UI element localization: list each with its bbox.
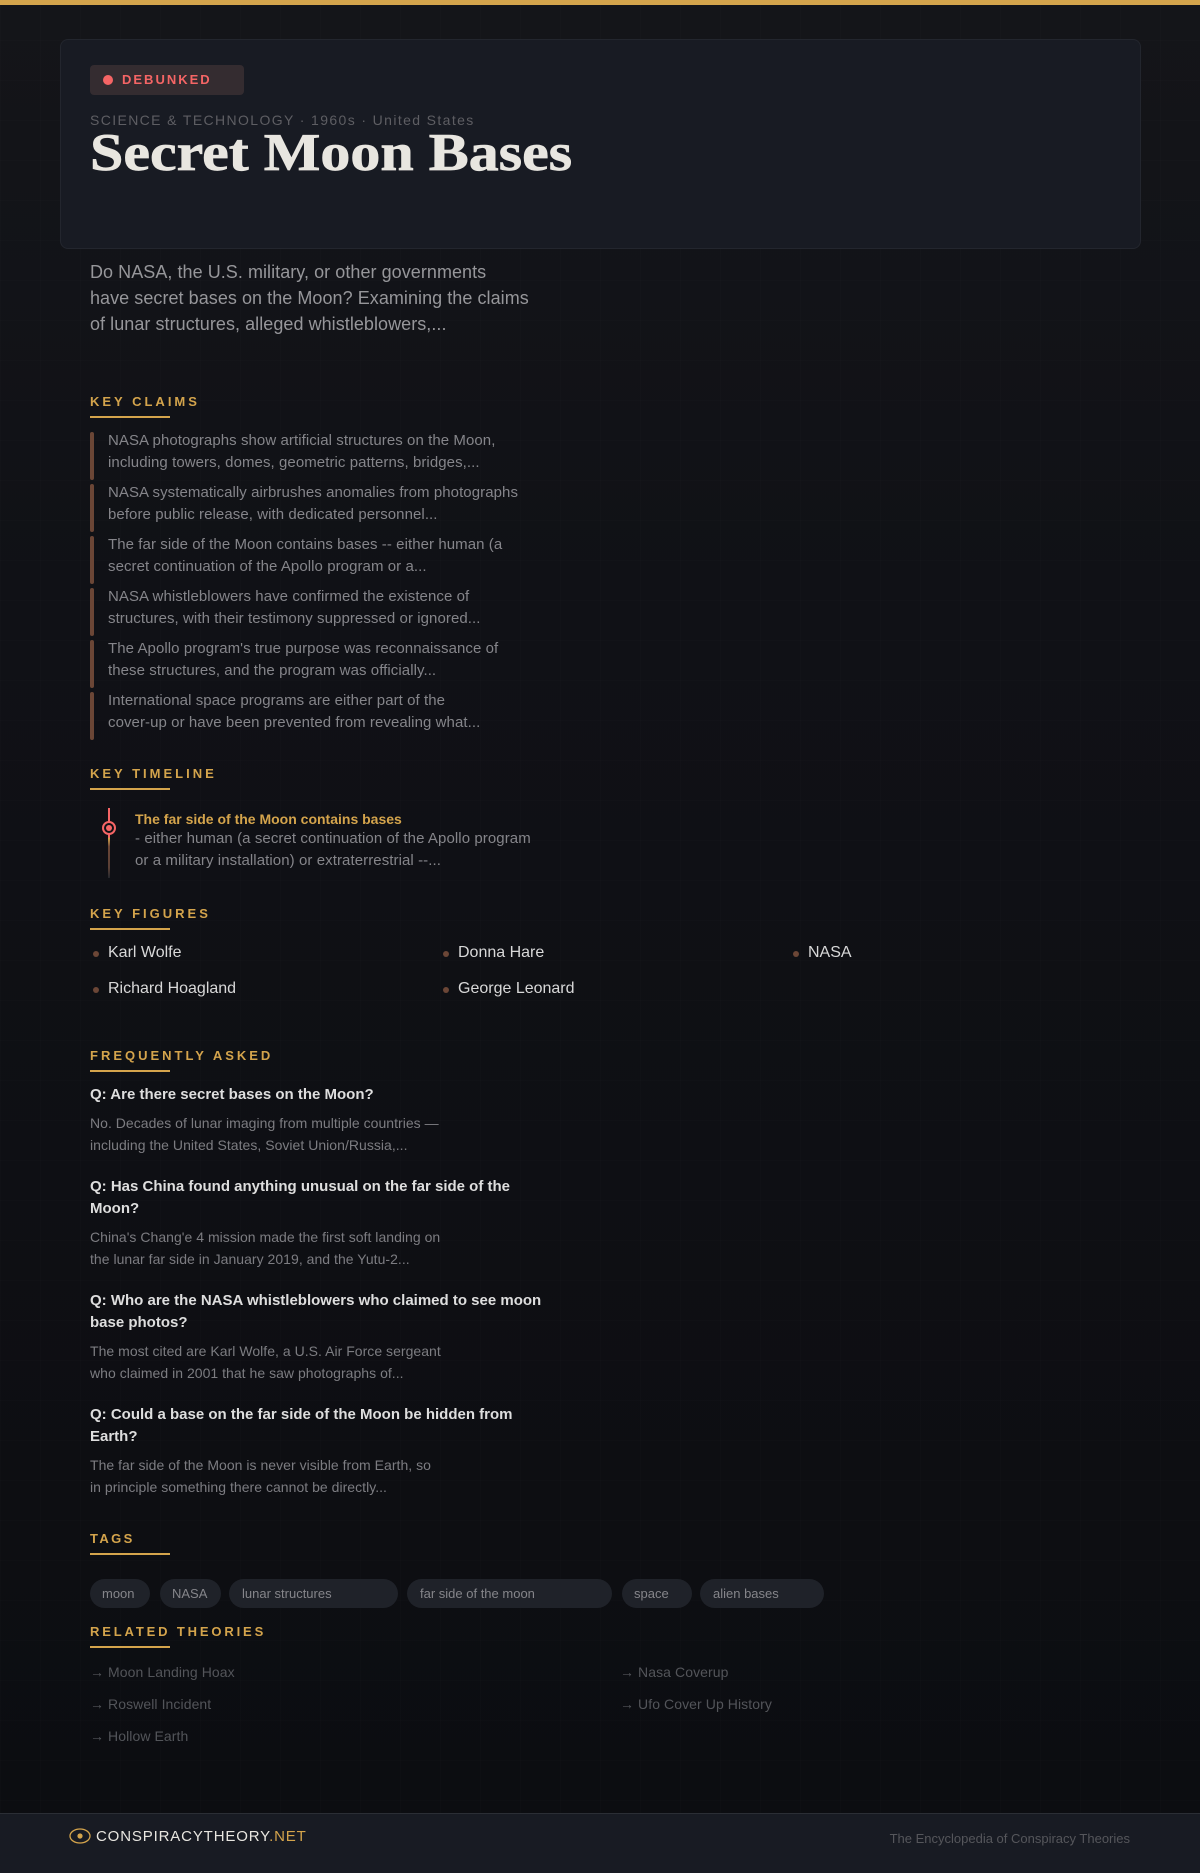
tag: space <box>622 1579 692 1608</box>
claim 4: NASA whistleblowers have confirmed the existence of <box>108 588 469 605</box>
claim 6: cover-up or have been prevented from revealing what... <box>108 714 480 731</box>
claim 3: The far side of the Moon contains bases -- either human (a <box>108 536 502 553</box>
link: Roswell Incident: → Roswell Incident <box>90 1696 211 1712</box>
badge dot <box>103 75 113 85</box>
tag: far side of the moon <box>407 1579 612 1608</box>
tag: NASA <box>160 1579 221 1608</box>
claim 2: NASA systematically airbrushes anomalies from photographs <box>108 484 518 501</box>
link: Ufo Cover Up History: → Ufo Cover Up History <box>620 1696 772 1712</box>
faq item 3 <box>90 1292 541 1381</box>
claim 5: these structures, and the program was officially... <box>108 662 436 679</box>
faq item 2: China's Chang'e 4 mission made the first soft landing on <box>90 1229 440 1245</box>
faq item 4: in principle something there cannot be directly... <box>90 1479 387 1495</box>
heading: related theories: RELATED THEORIES <box>90 1624 266 1639</box>
claim 4 <box>90 588 480 636</box>
faq item 3: who claimed in 2001 that he saw photographs of... <box>90 1365 404 1381</box>
faq item 2: the lunar far side in January 2019, and the Yutu-2... <box>90 1251 410 1267</box>
tag: NASA: NASA <box>172 1586 207 1601</box>
panel: hero header <box>60 39 1141 249</box>
tag: lunar structures: lunar structures <box>242 1586 332 1601</box>
panel: tags row <box>90 1579 824 1608</box>
link: Nasa Coverup: → Nasa Coverup <box>620 1664 728 1680</box>
faq item 1 <box>90 1086 439 1153</box>
faq item 4: The far side of the Moon is never visible from Earth, so <box>90 1457 431 1473</box>
faq item 3: Q: Who are the NASA whistleblowers who claimed to see moon <box>90 1292 541 1309</box>
intro description <box>90 262 529 334</box>
figure: Donna Hare: Donna Hare <box>458 944 544 961</box>
tag: space: space <box>634 1586 669 1601</box>
panel: timeline entry <box>102 808 531 878</box>
tag: lunar structures <box>229 1579 398 1608</box>
link: Moon Landing Hoax: → Moon Landing Hoax <box>90 1664 235 1680</box>
claim 2 <box>90 484 518 532</box>
faq item 4 <box>90 1406 513 1495</box>
faq item 3: The most cited are Karl Wolfe, a U.S. Air Force sergeant <box>90 1343 441 1359</box>
timeline title: The far side of the Moon contains bases <box>135 811 402 827</box>
footer <box>0 1813 1200 1873</box>
faq item 2: Moon? <box>90 1200 139 1217</box>
figure: George Leonard: George Leonard <box>458 980 575 997</box>
faq item 1: Q: Are there secret bases on the Moon? <box>90 1086 374 1103</box>
icon: eye logo <box>69 1828 91 1844</box>
tag: far side of the moon: far side of the moon <box>420 1586 535 1601</box>
claim 3: secret continuation of the Apollo program or a... <box>108 558 427 575</box>
timeline text <box>135 830 531 869</box>
claim 5 <box>90 640 498 688</box>
intro description: of lunar structures, alleged whistleblowers,... <box>90 314 447 334</box>
claim 5: The Apollo program's true purpose was reconnaissance of <box>108 640 498 657</box>
top accent bar <box>0 0 1200 5</box>
claim 6: International space programs are either part of the <box>108 692 445 709</box>
claim 3 <box>90 536 502 584</box>
panel: key figures list <box>93 944 852 997</box>
tag: alien bases <box>700 1579 824 1608</box>
timeline text: - either human (a secret continuation of the Apollo program <box>135 830 531 847</box>
intro description: have secret bases on the Moon? Examining the claims <box>90 288 529 308</box>
faq item 2: Q: Has China found anything unusual on the far side of the <box>90 1178 510 1195</box>
timeline line and node <box>102 808 116 878</box>
faq item 1: No. Decades of lunar imaging from multiple countries — <box>90 1115 439 1131</box>
heading: key timeline: KEY TIMELINE <box>90 766 217 781</box>
tag: moon <box>90 1579 150 1608</box>
status badge: debunked <box>90 65 244 95</box>
claim 4: structures, with their testimony suppressed or ignored... <box>108 610 480 627</box>
footer tagline: The Encyclopedia of Conspiracy Theories <box>890 1831 1130 1846</box>
badge label: DEBUNKED <box>122 72 212 87</box>
timeline text: or a military installation) or extraterrestrial --... <box>135 852 441 869</box>
claim 2: before public release, with dedicated personnel... <box>108 506 438 523</box>
tag: moon: moon <box>102 1586 135 1601</box>
heading: key claims: KEY CLAIMS <box>90 394 200 409</box>
heading: key figures: KEY FIGURES <box>90 906 211 921</box>
figure: Richard Hoagland: Richard Hoagland <box>108 980 236 997</box>
faq item 1: including the United States, Soviet Union/Russia,... <box>90 1137 408 1153</box>
category meta line: SCIENCE & TECHNOLOGY · 1960s · United States <box>90 112 475 128</box>
claim 1: including towers, domes, geometric patterns, bridges,... <box>108 454 480 471</box>
footer logo: CONSPIRACYTHEORY.NET <box>96 1828 307 1845</box>
heading: frequently asked: FREQUENTLY ASKED <box>90 1048 273 1063</box>
figure: NASA: NASA <box>808 944 852 961</box>
claim 1: NASA photographs show artificial structures on the Moon, <box>108 432 495 449</box>
faq item 4: Q: Could a base on the far side of the Moon be hidden from <box>90 1406 513 1423</box>
title: Secret Moon Bases <box>90 124 572 182</box>
tag: alien bases: alien bases <box>713 1586 779 1601</box>
link: Hollow Earth: → Hollow Earth <box>90 1728 188 1744</box>
panel: key claims list <box>90 432 518 740</box>
faq item 4: Earth? <box>90 1428 138 1445</box>
panel: related theories links <box>90 1664 772 1744</box>
faq item 3: base photos? <box>90 1314 188 1331</box>
heading: tags: TAGS <box>90 1531 135 1546</box>
figure: Karl Wolfe: Karl Wolfe <box>108 944 182 961</box>
intro description: Do NASA, the U.S. military, or other governments <box>90 262 486 282</box>
claim 1 <box>90 432 495 480</box>
claim 6 <box>90 692 480 740</box>
faq item 2 <box>90 1178 510 1267</box>
